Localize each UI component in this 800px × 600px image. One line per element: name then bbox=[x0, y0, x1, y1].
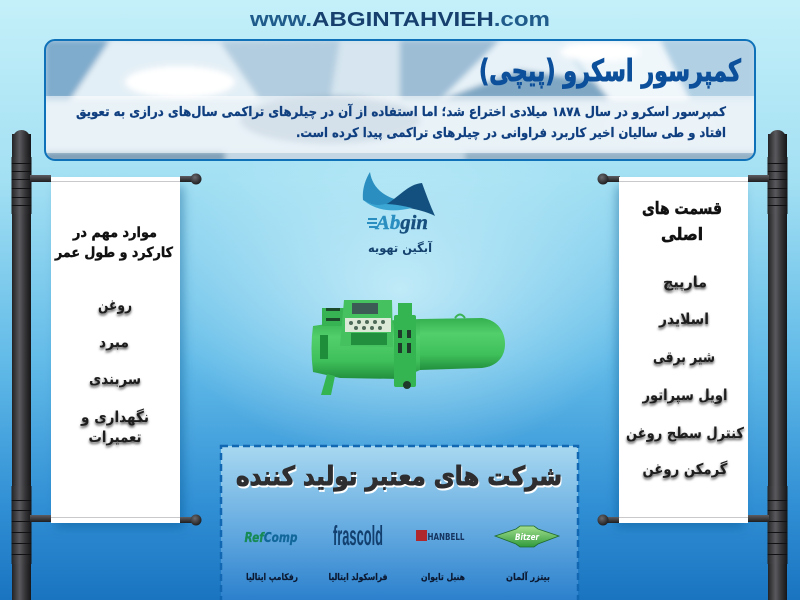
panel body text bbox=[76, 103, 726, 141]
left banner list: روغن bbox=[98, 298, 132, 316]
left banner list: مبرد bbox=[99, 333, 129, 351]
panel body text: کمپرسور اسکرو در سال ۱۸۷۸ میلادی اختراع شد؛ اما استفاده از آن در چیلرهای تراکمی سال‌های درازی به تعویق bbox=[76, 103, 726, 120]
terminal box bbox=[344, 300, 392, 320]
brand: Bitzer bbox=[495, 526, 559, 583]
left banner list: تعمیرات bbox=[88, 430, 142, 448]
right banner list: گرمکن روغن bbox=[642, 462, 728, 480]
right banner list: شیر برقی bbox=[653, 348, 715, 366]
brand: Hanbell bbox=[416, 530, 465, 583]
right banner bbox=[598, 174, 769, 528]
left fittings bbox=[322, 308, 344, 326]
left banner list: تعمیرات bbox=[88, 428, 142, 446]
brand: RefComp: رفکامپ ایتالیا bbox=[246, 573, 298, 583]
brand: Frascold: frascold bbox=[333, 520, 383, 551]
foot bbox=[321, 374, 335, 395]
right banner list: اسلایدر bbox=[658, 310, 709, 328]
left banner list bbox=[80, 296, 149, 448]
left banner bbox=[30, 174, 202, 528]
compressor image bbox=[312, 300, 505, 395]
manufacturers heading: شرکت های معتبر تولید کننده bbox=[237, 464, 563, 494]
tank bbox=[420, 318, 505, 370]
logo mark bbox=[363, 172, 435, 216]
brand: RefComp bbox=[244, 531, 298, 583]
brand: Frascold bbox=[328, 520, 388, 583]
brand: Bitzer: بیتزر آلمان bbox=[506, 571, 550, 583]
right banner list: اویل سپراتور bbox=[642, 386, 728, 405]
right banner heading: اصلی bbox=[661, 225, 703, 245]
logo wordmark: Abgin bbox=[374, 212, 428, 234]
right banner heading: قسمت های bbox=[642, 199, 722, 219]
main body bbox=[312, 319, 420, 379]
right banner heading bbox=[642, 199, 722, 245]
brand: Bitzer: Bitzer bbox=[515, 533, 539, 543]
logo speed lines bbox=[367, 218, 377, 228]
brand: Hanbell: هنبل تایوان bbox=[421, 573, 465, 583]
website address: www. ABGINTAHVIEH .com bbox=[249, 9, 550, 31]
right banner list: مارپیچ bbox=[663, 273, 707, 292]
logo: Abgin bbox=[363, 172, 435, 256]
right banner list: کنترل سطح روغن bbox=[626, 424, 744, 442]
panel body text: افتاد و طی سالیان اخیر کاربرد فراوانی در چیلرهای تراکمی پیدا کرده است. bbox=[296, 126, 726, 141]
flange bbox=[394, 315, 416, 387]
right banner list bbox=[626, 273, 744, 480]
left banner list: سربندی bbox=[89, 372, 141, 390]
left pole bbox=[12, 130, 32, 600]
brand: Hanbell: HANBELL bbox=[428, 532, 465, 543]
translucent text band bbox=[45, 96, 755, 153]
panel: introduction bbox=[45, 40, 755, 162]
left banner list: سربندی bbox=[89, 370, 141, 388]
right banner list: اسلایدر bbox=[658, 312, 709, 330]
brand: RefComp: RefComp bbox=[244, 531, 298, 546]
left banner list: مبرد bbox=[99, 335, 129, 353]
panel: manufacturers bbox=[221, 446, 578, 600]
terminals bbox=[349, 320, 385, 330]
left banner heading: موارد مهم در bbox=[72, 225, 157, 241]
right banner list: کنترل سطح روغن bbox=[626, 426, 744, 444]
solenoid valves bbox=[398, 330, 411, 389]
left banner heading bbox=[54, 225, 174, 261]
right banner list: شیر برقی bbox=[653, 350, 715, 368]
manufacturers heading: شرکت های معتبر تولید کننده bbox=[236, 462, 562, 492]
logo persian name: آبگین تهویه bbox=[368, 240, 433, 256]
brand: Frascold: فراسکولد ایتالیا bbox=[328, 573, 388, 583]
left banner list: نگهداری و bbox=[80, 408, 149, 426]
left banner list: روغن bbox=[98, 296, 132, 314]
right banner list: گرمکن روغن bbox=[642, 460, 728, 478]
right banner list: اویل سپراتور bbox=[642, 388, 728, 407]
right banner list: مارپیچ bbox=[663, 275, 707, 294]
left banner heading: کارکرد و طول عمر bbox=[54, 245, 174, 261]
right pole bbox=[768, 130, 788, 600]
left banner list: نگهداری و bbox=[80, 410, 149, 428]
ice texture bbox=[45, 40, 755, 162]
